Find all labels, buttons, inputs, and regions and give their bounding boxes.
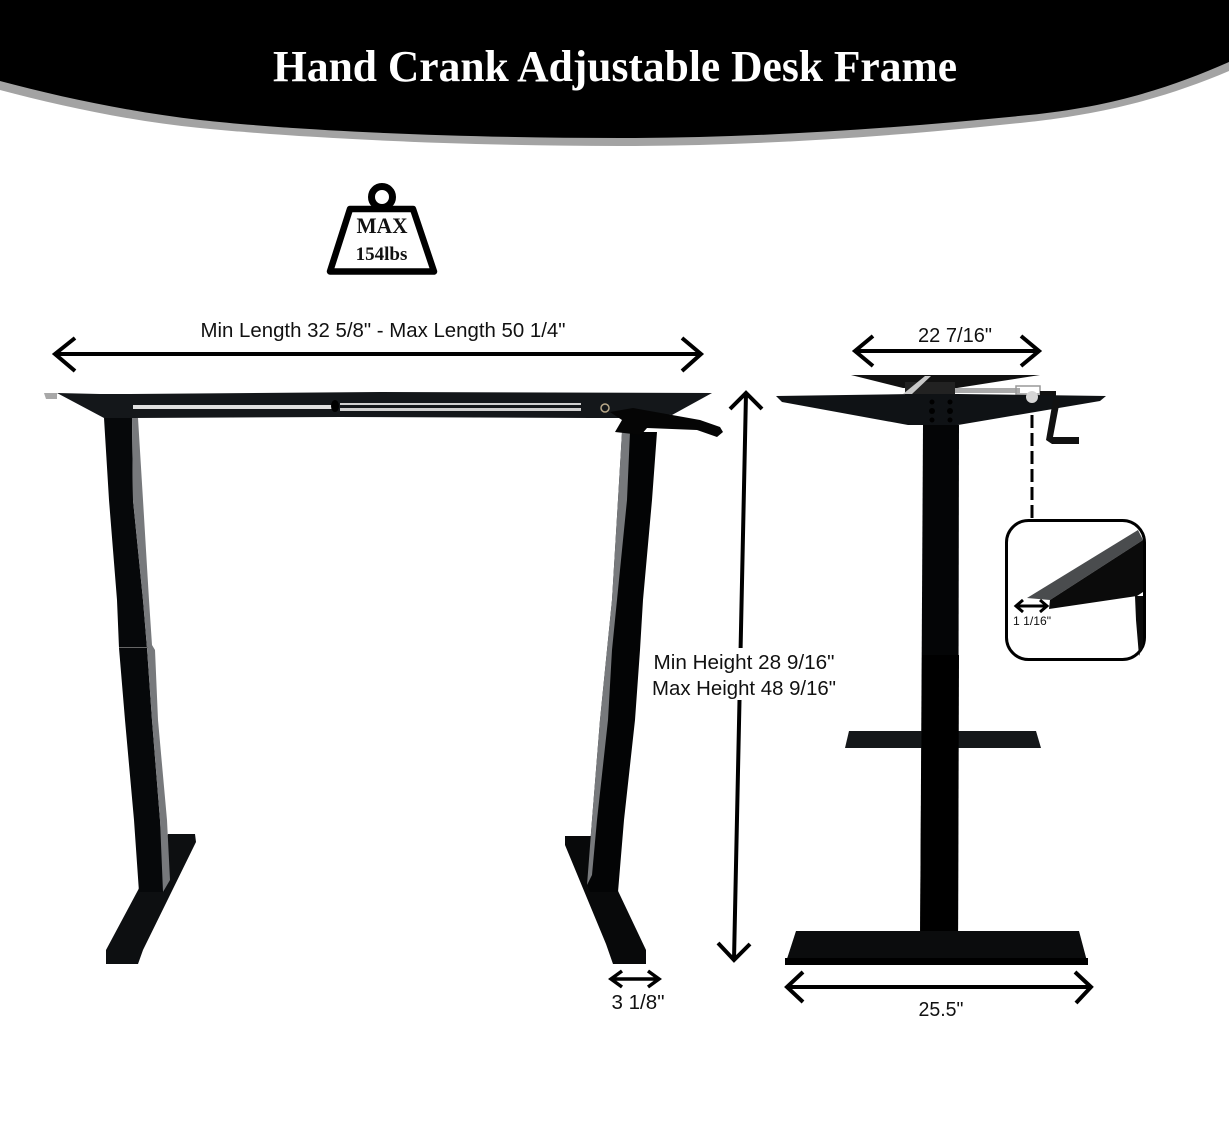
icon: max weight 154lbs (330, 186, 434, 272)
callout: top plate detail (1006, 520, 1144, 660)
height labels: Min Height 28 9/16" (654, 651, 834, 674)
height labels: Max Height 48 9/16" (652, 677, 836, 700)
column front (920, 655, 959, 952)
dashed connector (1030, 415, 1034, 518)
base foot (785, 931, 1088, 965)
left foot (106, 834, 196, 964)
front view desk frame (44, 392, 723, 964)
left leg (100, 396, 170, 892)
crank handle (610, 408, 723, 437)
mechanism (903, 376, 1056, 396)
upper plate (851, 375, 1040, 388)
crank arm (1046, 400, 1079, 444)
detail width label: 1 1/16" (1013, 614, 1051, 628)
arrow: depth (855, 336, 1039, 366)
icon: max weight 154lbs: 154lbs (356, 244, 407, 265)
bolts (929, 400, 953, 422)
arrow: length (55, 338, 701, 371)
arrow: foot width (611, 971, 659, 987)
length label: Min Length 32 5/8" - Max Length 50 1/4" (200, 319, 566, 342)
title: Hand Crank Adjustable Desk Frame (273, 42, 957, 91)
base width label: 25.5" (918, 999, 964, 1021)
icon: max weight 154lbs: MAX (356, 213, 408, 238)
column (920, 425, 959, 952)
foot width label: 3 1/8" (612, 992, 664, 1014)
arrow: detail width (1016, 600, 1047, 612)
top beam (44, 392, 712, 418)
height labels (650, 648, 836, 700)
callout marker (1026, 391, 1038, 403)
arrow: base width (787, 972, 1091, 1003)
arrow: height (718, 393, 762, 960)
right foot (565, 836, 646, 964)
side view desk frame (776, 375, 1106, 965)
depth label: 22 7/16" (918, 324, 992, 347)
main plate (776, 394, 1106, 425)
right leg (587, 432, 657, 892)
crossbar foot (845, 731, 1041, 748)
header banner (0, 0, 1229, 146)
plate detail (1027, 530, 1143, 600)
